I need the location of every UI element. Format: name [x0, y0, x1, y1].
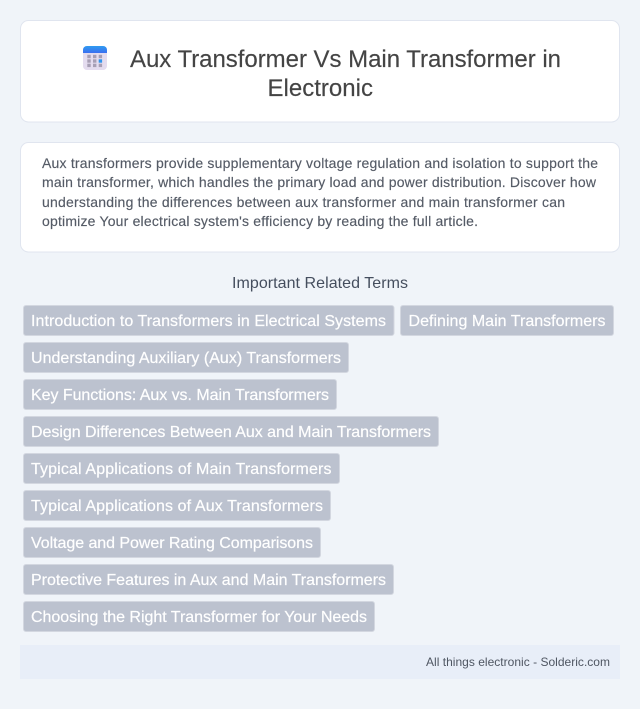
- chip: design differences: [24, 416, 438, 446]
- chip: understanding aux: Understanding Auxiliary (Aux) Transformers: [31, 350, 341, 367]
- chip: applications main: [24, 454, 340, 484]
- chip: defining main: Defining Main Transformers: [408, 313, 606, 330]
- chip: applications main: Typical Applications of Main Transformers: [31, 461, 332, 478]
- related terms chips: [24, 306, 614, 632]
- title: [130, 46, 561, 102]
- chip: defining main: [400, 306, 614, 336]
- chip: voltage and power: Voltage and Power Rating Comparisons: [31, 535, 313, 552]
- chip: introduction: Introduction to Transformers in Electrical Systems: [31, 313, 386, 330]
- title: Electronic: [268, 75, 373, 102]
- chip: choosing transformer: Choosing the Right Transformer for Your Needs: [31, 609, 367, 626]
- chip: applications aux: Typical Applications of Aux Transformers: [31, 498, 323, 515]
- intro text panel: [20, 142, 620, 252]
- header panel: [20, 20, 620, 122]
- chip: introduction: [24, 306, 394, 336]
- title: Aux Transformer Vs Main Transformer in: [130, 46, 561, 73]
- icon: calendar grid: [83, 46, 107, 70]
- footer text: All things electronic - Solderic.com: [426, 655, 610, 669]
- chip: protective features: Protective Features in Aux and Main Transformers: [31, 572, 386, 589]
- intro paragraph: understanding the differences between aux transformer and main transformer can: [42, 194, 565, 210]
- intro paragraph: Aux transformers provide supplementary voltage regulation and isolation to support the: [42, 155, 598, 171]
- chip: protective features: [24, 564, 394, 594]
- heading: related terms: Important Related Terms: [232, 275, 408, 292]
- intro paragraph: [42, 155, 598, 229]
- chip: choosing transformer: [24, 602, 374, 632]
- chip: key functions: [24, 380, 336, 410]
- chip: key functions: Key Functions: Aux vs. Main Transformers: [31, 387, 329, 404]
- chip: voltage and power: [24, 528, 320, 558]
- chip: understanding aux: [24, 342, 348, 372]
- intro paragraph: optimize Your electrical system's efficiency by reading the full article.: [42, 213, 478, 229]
- chip: design differences: Design Differences Between Aux and Main Transformers: [31, 424, 431, 441]
- intro paragraph: main transformer, which handles the primary load and power distribution. Discover how: [42, 174, 597, 190]
- footer bar: [20, 645, 620, 679]
- chip: applications aux: [24, 490, 330, 520]
